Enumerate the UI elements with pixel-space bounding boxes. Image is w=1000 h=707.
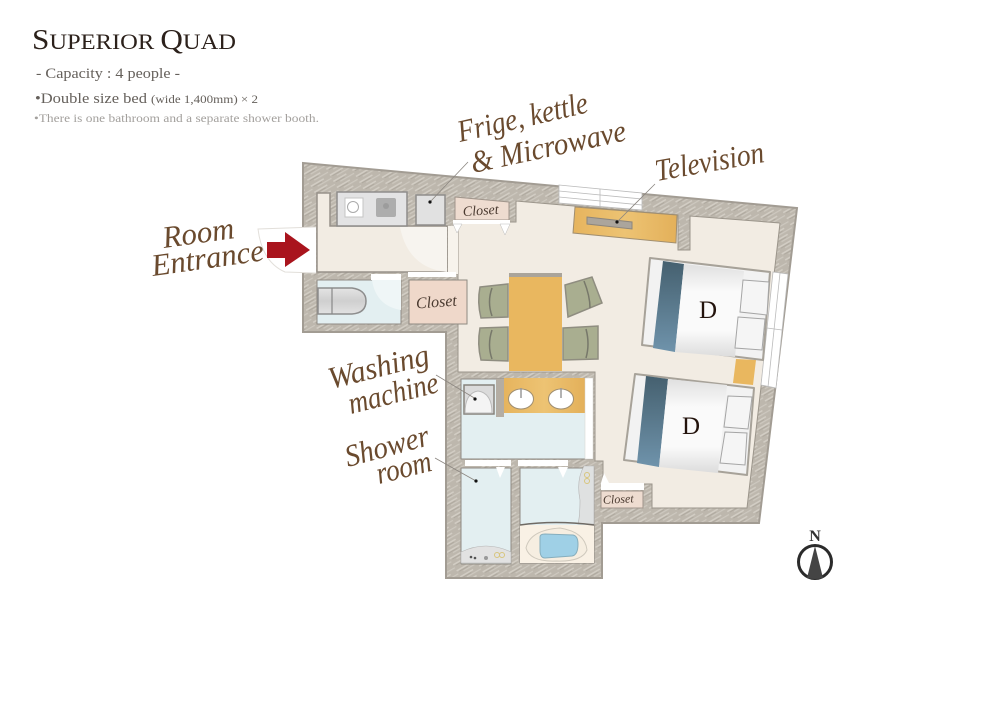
- bed size text: •Double size bed: [35, 91, 148, 107]
- label: washing machine: Washing: [324, 337, 433, 396]
- door threshold: [408, 272, 456, 277]
- closet: middle: Closet: [415, 293, 458, 312]
- closet: bottom: [601, 473, 644, 508]
- bed size text: [35, 91, 258, 107]
- closet: top: [453, 197, 510, 235]
- walls: [303, 163, 797, 578]
- label: room entrance: Room: [159, 210, 236, 255]
- entry door swing: [400, 227, 447, 272]
- bathroom with tub: [518, 460, 594, 563]
- label: fridge, kettle and microwave: [453, 85, 629, 180]
- icon: north compass: [798, 528, 832, 579]
- fridge: [416, 195, 445, 225]
- label: washing machine: machine: [344, 365, 442, 421]
- label: fridge, kettle and microwave: & Microwave: [467, 113, 629, 180]
- floor plan: [258, 162, 797, 578]
- toilet room: [317, 274, 401, 324]
- label: shower room: Shower: [341, 417, 434, 474]
- right window: [761, 272, 788, 388]
- bed size text: (wide 1,400mm) × 2: [151, 94, 258, 106]
- icon: north compass: N: [809, 528, 821, 545]
- label: television: Television: [652, 134, 767, 188]
- side table: [733, 359, 756, 385]
- label: fridge, kettle and microwave: Frige, kettle: [453, 85, 591, 149]
- bed 1: D: [699, 297, 717, 324]
- bed 2: D: [682, 413, 700, 440]
- label: room entrance: Entrance: [148, 233, 266, 283]
- kitchen counter: [337, 192, 407, 226]
- chairs: [479, 277, 602, 361]
- label: room entrance: [148, 210, 266, 283]
- washroom: [461, 378, 593, 459]
- closet: middle: [409, 280, 467, 324]
- shower room: [461, 460, 511, 564]
- top window: [559, 185, 642, 210]
- closet: bottom: Closet: [603, 491, 635, 507]
- label: washing machine: [324, 337, 442, 421]
- arrow: entrance: [267, 232, 310, 267]
- label: shower room: room: [372, 443, 435, 491]
- title: SUPERIOR QUAD: [32, 25, 236, 56]
- capacity text: - Capacity : 4 people -: [36, 66, 180, 82]
- entrance door: [258, 227, 316, 273]
- closet: top: Closet: [462, 203, 500, 220]
- bed 1: [642, 258, 770, 360]
- tv cabinet: [573, 207, 677, 243]
- dining table: [509, 273, 562, 371]
- bathroom note: •There is one bathroom and a separate shower booth.: [34, 113, 319, 125]
- bed 2: [624, 374, 754, 475]
- main room floor: [458, 201, 780, 508]
- leader lines: [430, 162, 655, 481]
- entry floor: [317, 193, 447, 272]
